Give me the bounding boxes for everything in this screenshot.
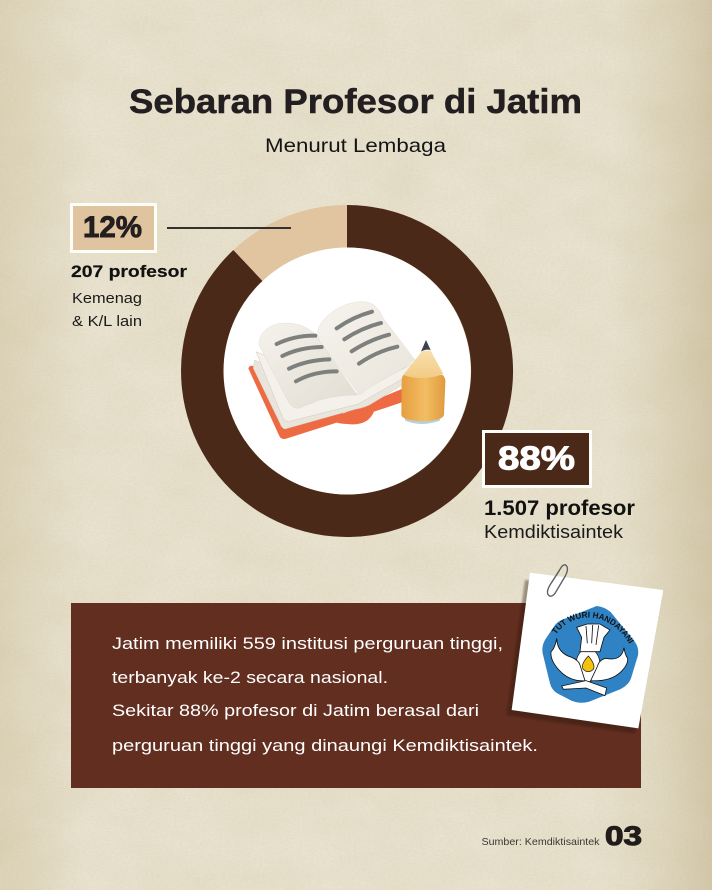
callout box: 88% [484, 432, 590, 486]
donut centre circle [224, 248, 470, 494]
icon: paperclip [547, 565, 567, 596]
logo flame [582, 656, 594, 672]
icon: right page lines [337, 312, 397, 364]
icon: book page stack [253, 360, 415, 429]
icon: left page [259, 323, 357, 408]
summary text: perguruan tinggi yang dinaungi Kemdiktisaintek. [112, 736, 538, 755]
summary text: Jatim memiliki 559 institusi perguruan tinggi, [112, 634, 503, 653]
donut segment: 88% Kemdiktisaintek [181, 205, 513, 537]
card [512, 573, 663, 728]
logo shield [542, 606, 638, 703]
callout count: 1.507 profesor: 1.507 profesor [484, 497, 635, 520]
callout value: 12%: 12% [83, 211, 142, 244]
title: Sebaran Profesor di Jatim [129, 83, 582, 121]
logo book [562, 681, 607, 696]
logo motto: TUT WURI HANDAYANI [551, 612, 634, 644]
icon: open book and pencil [248, 302, 445, 439]
logo right wing [591, 648, 628, 681]
logo: Tut Wuri Handayani [542, 606, 638, 703]
callout value: 88%: 88% [498, 440, 575, 476]
logo feathers [577, 624, 610, 652]
callout label: Kemenag: Kemenag [72, 291, 142, 307]
page number: 03 [605, 821, 642, 851]
callout: 88% [484, 432, 635, 542]
logo left wing [551, 638, 585, 681]
note card with logo [506, 564, 664, 734]
icon: left page lines [277, 336, 337, 381]
summary text [112, 634, 538, 755]
icon: right page [318, 302, 415, 395]
callout label: K/L lain: & K/L lain [72, 314, 142, 330]
icon: pencil [401, 340, 445, 424]
callout count: 207 profesor: 207 profesor [71, 262, 187, 281]
subtitle: Menurut Lembaga [265, 135, 446, 157]
card shadow [507, 580, 657, 733]
callout label: Kemdiktisaintek: Kemdiktisaintek [484, 522, 624, 542]
donut chart [181, 205, 513, 537]
logo centre body [576, 648, 600, 682]
callout box: 12% [72, 204, 156, 252]
source note: Sumber: Kemdiktisaintek [482, 836, 600, 848]
summary text: Sekitar 88% profesor di Jatim berasal dari [112, 701, 479, 720]
donut segment: 12% Kemenag [233, 205, 347, 281]
panel: summary [71, 603, 641, 788]
callout: 12% [71, 204, 291, 330]
callout leader line [167, 227, 291, 229]
icon: book cover [248, 366, 404, 439]
summary text: terbanyak ke-2 secara nasional. [112, 668, 388, 687]
